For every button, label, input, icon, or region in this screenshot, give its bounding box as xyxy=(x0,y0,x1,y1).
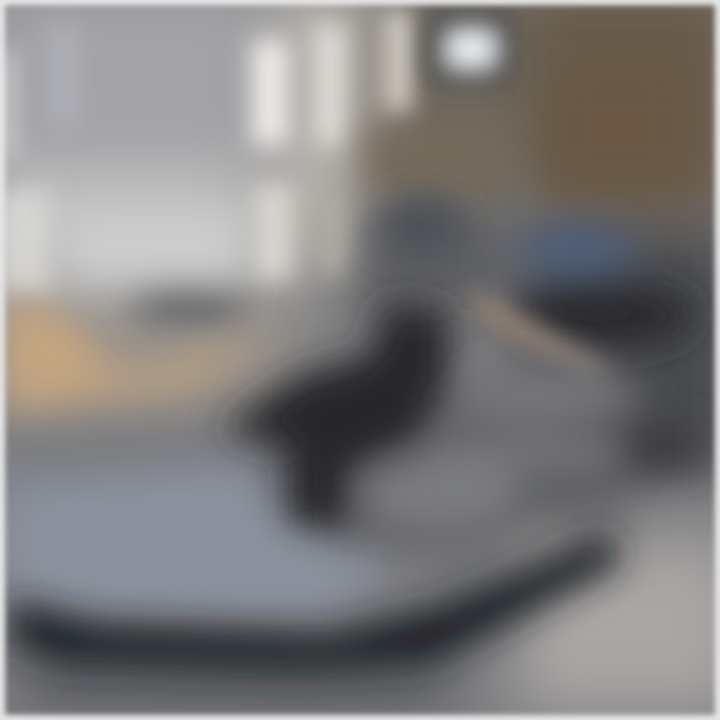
blue-grey chair at right xyxy=(375,197,695,347)
window xyxy=(428,12,512,82)
lower left cushion xyxy=(15,470,400,615)
peach floor wedge xyxy=(0,295,270,412)
dark central sofa form xyxy=(220,300,700,530)
dark sofa base band xyxy=(10,530,620,672)
light floor band and low table xyxy=(70,215,252,321)
brown wood panels xyxy=(365,70,690,195)
white vertical curtains xyxy=(0,10,411,295)
tan accent streak xyxy=(387,295,610,407)
